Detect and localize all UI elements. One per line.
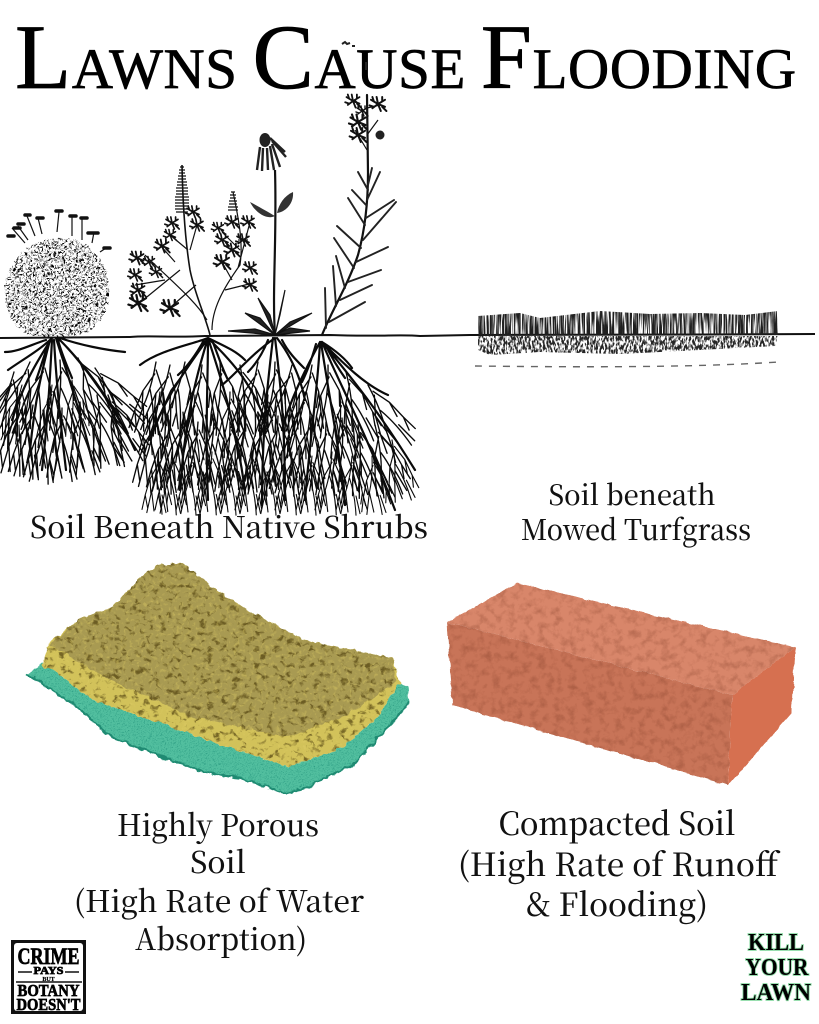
label: highly porous soil: Soil xyxy=(190,838,246,882)
label: highly porous soil: (High Rate of Water xyxy=(74,877,364,921)
label: highly porous soil xyxy=(74,801,364,959)
label: highly porous soil: Highly Porous xyxy=(117,801,319,845)
brick right face xyxy=(728,647,795,785)
badge: kill your lawn: LAWN xyxy=(741,980,812,1006)
badge: kill your lawn: KILL xyxy=(748,930,804,956)
brick texture xyxy=(448,584,795,785)
sponge green base xyxy=(26,662,410,794)
title: LAWNS CAUSE FLOODING xyxy=(15,6,796,108)
badge: crime pays but botany doesn't: BOTANY xyxy=(18,981,80,1000)
ground line xyxy=(0,335,470,338)
badge: crime pays but botany doesn't: CRIME xyxy=(18,944,80,969)
badge: kill your lawn: YOUR xyxy=(746,955,809,981)
roots: plants two, three and four xyxy=(128,338,422,517)
plant: coneflower xyxy=(228,133,312,335)
shallow roots xyxy=(478,336,778,355)
badge: crime pays but botany doesn't: PAYS xyxy=(34,965,64,977)
grass blades xyxy=(478,310,778,335)
dashed soil depth line xyxy=(475,362,778,367)
sponge yellow body xyxy=(42,562,402,768)
illustration: turfgrass with shallow roots xyxy=(470,310,815,367)
label: soil beneath mowed turfgrass: Mowed Turfgrass xyxy=(521,508,751,549)
illustration: native plants with deep roots xyxy=(0,94,470,517)
photo: brick xyxy=(446,582,796,785)
badge: crime pays but botany doesn't xyxy=(11,940,86,1014)
plant: branching shrub xyxy=(128,165,257,335)
label: soil beneath native shrubs: Soil Beneath Native Shrubs xyxy=(30,503,428,547)
brick front face xyxy=(447,622,732,785)
roots: plant one xyxy=(0,338,154,485)
plant: round cushion shrub xyxy=(4,209,112,338)
brick top face xyxy=(447,583,795,695)
label: compacted soil xyxy=(458,799,781,926)
badge: kill your lawn xyxy=(741,930,812,1006)
badge: crime pays but botany doesn't: BUT xyxy=(42,977,55,983)
label: soil beneath mowed turfgrass: Soil beneath xyxy=(548,474,716,514)
photo: sponge xyxy=(20,555,420,800)
plant: tall feathery stem xyxy=(322,94,396,335)
label: highly porous soil: Absorption) xyxy=(135,915,307,959)
label: compacted soil: & Flooding) xyxy=(526,880,708,926)
label: compacted soil: (High Rate of Runoff xyxy=(458,840,781,886)
label: soil beneath mowed turfgrass xyxy=(521,474,751,549)
label: compacted soil: Compacted Soil xyxy=(498,799,736,845)
badge: crime pays but botany doesn't: DOESN'T xyxy=(16,995,81,1014)
